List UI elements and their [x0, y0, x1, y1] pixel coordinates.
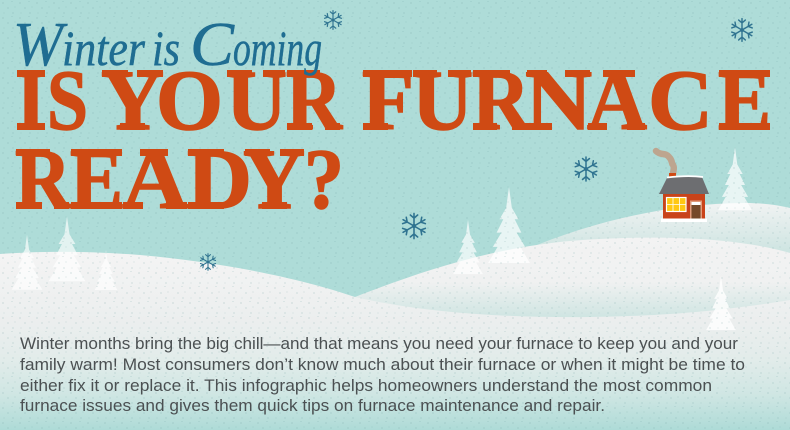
snowflake: near house	[574, 157, 598, 181]
heading: Is your furnace: F	[362, 52, 414, 148]
right middle snow hill	[355, 238, 790, 330]
heading: Is your furnace: O	[156, 52, 223, 148]
heading: Is your furnace: N	[525, 52, 592, 148]
heading: Ready?: A	[122, 131, 188, 227]
chimney smoke	[656, 151, 674, 174]
heading: Ready?: R	[15, 131, 72, 227]
heading: Is your furnace: U	[412, 52, 473, 148]
intro paragraph: Winter months bring the big chill—and that means you need your furnace to keep you and your	[20, 335, 739, 353]
snowflake: left hill	[200, 254, 216, 270]
heading: Is your furnace: E	[718, 52, 771, 148]
intro paragraph: furnace issues and gives them quick tips on furnace maintenance and repair.	[20, 397, 605, 415]
heading: Winter is Coming: C	[190, 11, 235, 79]
intro paragraph: either fix it or replace it. This infographic helps homeowners understand the most common	[20, 377, 712, 395]
snow at base	[661, 218, 707, 222]
heading: Is your furnace: R	[472, 52, 531, 148]
intro paragraph: family warm! Most consumers don’t know much about their furnace or when it might be time to	[20, 356, 745, 374]
heading: Is your furnace: A	[587, 52, 647, 148]
snowflake: center	[401, 213, 427, 239]
heading: Is your furnace: I	[16, 52, 46, 148]
heading: Ready?	[15, 131, 344, 227]
heading: Winter is Coming: oming	[233, 20, 322, 76]
roof snow	[667, 176, 703, 178]
snowflake: top right	[730, 19, 754, 41]
roof	[659, 176, 709, 194]
tree: left smallest	[95, 250, 117, 290]
heading: Is your furnace: R	[286, 52, 343, 148]
window	[666, 197, 686, 212]
heading: Winter is Coming: W	[13, 11, 68, 79]
tree: middle right small	[453, 220, 483, 274]
tree behind house	[718, 147, 752, 210]
back right snow hill	[525, 203, 790, 330]
heading: Winter is Coming	[13, 11, 322, 79]
heading: Is your furnace: S	[47, 52, 88, 148]
heading: Is your furnace: Y	[101, 52, 164, 148]
chimney	[669, 173, 676, 178]
heading: Ready?: D	[187, 131, 252, 227]
heading: Is your furnace	[16, 52, 771, 148]
heading: Winter is Coming: is	[152, 20, 180, 76]
heading: Ready?: Y	[243, 131, 305, 227]
left front snow hill	[0, 252, 790, 430]
heading: Winter is Coming: inter	[62, 20, 145, 76]
lower right tree	[706, 276, 736, 330]
intro paragraph	[20, 335, 745, 415]
heading: Is your furnace: C	[648, 52, 713, 148]
tree: left tall	[49, 216, 85, 281]
tree: left short	[12, 235, 42, 290]
icon: house with smoke	[656, 151, 709, 222]
snowflake: top center	[324, 11, 342, 29]
door	[690, 200, 702, 220]
tree: middle right large	[488, 187, 530, 263]
heading: Ready?: E	[70, 131, 123, 227]
heading: Is your furnace: U	[226, 52, 287, 148]
heading: Ready?: ?	[304, 131, 344, 227]
house wall	[663, 193, 705, 219]
